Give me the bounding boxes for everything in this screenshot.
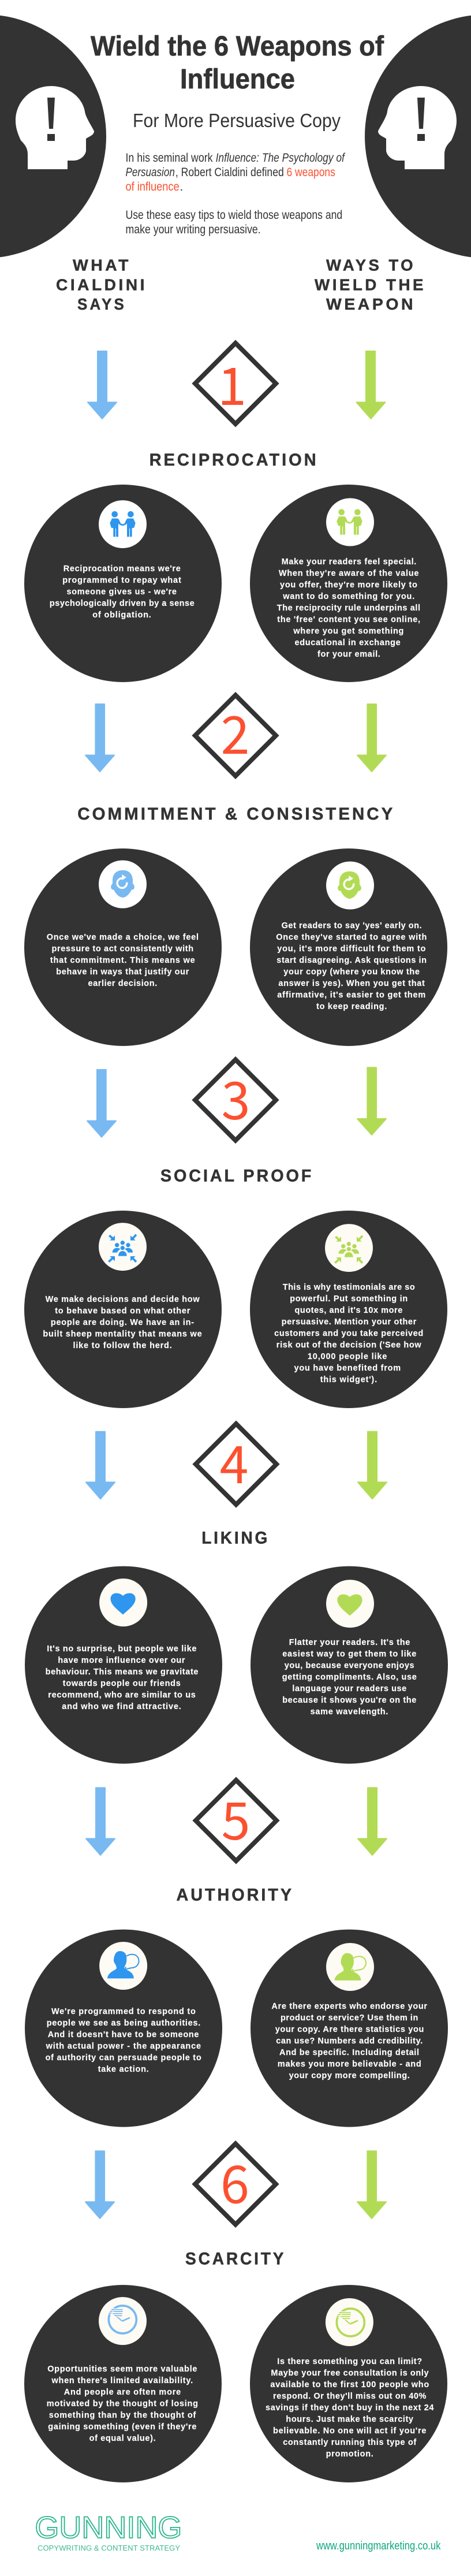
text: of equal value). — [89, 2434, 156, 2443]
title: Wield the 6 Weapons of — [91, 31, 384, 62]
intro paragraph: In his seminal work — [126, 151, 213, 165]
text — [43, 1295, 202, 1350]
intro paragraph — [126, 151, 346, 236]
text: available to the first 100 people who — [270, 2380, 429, 2389]
panel: ways to wield — [251, 1930, 448, 2127]
text: We make decisions and decide how — [46, 1295, 200, 1304]
text — [47, 2365, 198, 2443]
subtitle: For More Persuasive Copy — [133, 110, 341, 131]
column heading: what Cialdini says: SAYS — [77, 295, 126, 313]
text: Opportunities seem more valuable — [47, 2365, 197, 2374]
diamond with number 1 — [195, 343, 276, 424]
panel: ways to wield — [250, 2285, 447, 2482]
text: because it shows you're on the — [282, 1696, 416, 1705]
text — [274, 1283, 423, 1384]
panel: what Cialdini says — [25, 1930, 222, 2127]
website url: www.gunningmarketing.co.uk — [316, 2540, 441, 2552]
text: We're programmed to respond to — [51, 2007, 196, 2016]
icon: head with refresh arrow green — [326, 862, 374, 909]
panel: what Cialdini says — [24, 848, 222, 1046]
icon: person with speech bubble green — [326, 1943, 374, 1991]
diamond with number 4 — [196, 1423, 276, 1505]
icon: handshake blue — [99, 500, 147, 548]
arrow: left blue — [86, 1788, 115, 1855]
arrow: left blue — [88, 351, 117, 419]
column heading: ways to wield the weapon: WIELD THE — [315, 276, 426, 293]
text: Are there experts who endorse your — [271, 2002, 427, 2011]
intro paragraph: make your writing persuasive. — [126, 223, 261, 236]
panel: ways to wield — [250, 485, 447, 682]
text — [282, 1638, 417, 1717]
text — [271, 2002, 427, 2080]
panel: what Cialdini says — [24, 1211, 222, 1408]
panel: what Cialdini says — [25, 1566, 222, 1764]
text: people are doing. We have an in- — [51, 1318, 194, 1327]
text: people we see as being authorities. — [47, 2019, 200, 2028]
icon: crowd with arrows green — [325, 1224, 373, 1272]
text: makes you more believable - and — [278, 2060, 421, 2069]
text: Maybe your free consultation is only — [271, 2369, 429, 2378]
text: 10,000 people like — [308, 1352, 387, 1361]
arrow: right green — [358, 1432, 387, 1499]
panel: section 4 liking — [25, 1423, 448, 1764]
text: savings if they don't buy in the next 24 — [266, 2403, 433, 2413]
intro paragraph: of influence — [126, 180, 180, 193]
column heading: what Cialdini says: WHAT — [73, 256, 131, 274]
intro paragraph: . — [180, 180, 183, 193]
text: Make your readers feel special. — [282, 557, 416, 567]
column heading: ways to wield the weapon: WAYS TO — [326, 256, 416, 274]
text: behave in ways that justify our — [56, 967, 189, 977]
diamond with number 2 — [195, 694, 276, 776]
text: programmed to repay what — [62, 576, 181, 585]
diamond with number 2: 2 — [221, 694, 249, 769]
text: towards people our friends — [63, 1679, 181, 1688]
text: that commitment. This means we — [50, 956, 195, 965]
arrow: left blue — [85, 2151, 114, 2218]
panel: ways to wield — [251, 1566, 448, 1764]
text — [46, 1644, 198, 1711]
text: easiest way to get them to like — [282, 1650, 416, 1659]
text: educational in exchange — [294, 638, 401, 647]
text: with actual power - the appearance — [46, 2042, 201, 2051]
text: your copy. Are there statistics you — [275, 2025, 424, 2034]
text: It's no surprise, but people we like — [47, 1644, 196, 1654]
text: same wavelength. — [311, 1707, 388, 1717]
icon: clock green — [326, 2298, 373, 2346]
text: product or service? Use them in — [281, 2013, 418, 2023]
text: promotion. — [326, 2450, 373, 2459]
text: start disagreeing. Ask questions in — [276, 956, 427, 965]
heading: RECIPROCATION — [149, 451, 319, 470]
arrow: right green — [357, 704, 386, 772]
text: earlier decision. — [88, 979, 157, 988]
title — [91, 31, 384, 95]
text: you have benefited from — [294, 1364, 401, 1373]
text: you, because everyone enjoys — [285, 1661, 414, 1670]
text: Is there something you can limit? — [277, 2357, 422, 2366]
arrow: right green — [357, 2151, 386, 2218]
text: take action. — [98, 2065, 149, 2074]
panel: section 3 social proof — [24, 1059, 447, 1408]
diamond with number 1: 1 — [218, 345, 246, 420]
text: have more influence over our — [58, 1656, 185, 1665]
heading: SCARCITY — [185, 2250, 286, 2269]
text: want to do something for you. — [282, 592, 414, 601]
text: Once we've made a choice, we feel — [47, 933, 199, 942]
diamond with number 6 — [195, 2143, 276, 2225]
diamond with number 3: 3 — [222, 1059, 250, 1134]
text: respond. Or they'll miss out on 40% — [273, 2392, 426, 2401]
icon: crowd with arrows blue — [99, 1223, 147, 1271]
text: when there's limited availability. — [51, 2376, 193, 2385]
text: And be specific. Including detail — [279, 2048, 419, 2057]
column heading: ways to wield the weapon: WEAPON — [326, 295, 416, 313]
right head circle with icon — [365, 14, 471, 258]
panel: section 1 reciprocation — [24, 343, 447, 682]
panel: what Cialdini says — [24, 2285, 222, 2482]
text: Get readers to say 'yes' early on. — [282, 921, 422, 930]
arrow: right green — [357, 1067, 386, 1135]
icon: head with refresh arrow blue — [99, 861, 147, 908]
text — [266, 2357, 433, 2459]
panel: ways to wield — [250, 848, 447, 1046]
diamond with number 5: 5 — [222, 1780, 250, 1855]
text — [47, 933, 199, 988]
text: to keep reading. — [316, 1002, 387, 1011]
title: Influence — [180, 64, 295, 95]
text — [277, 557, 420, 659]
panel: section 5 authority — [25, 1780, 448, 2127]
text: and who we find attractive. — [62, 1702, 181, 1711]
panel: section 6 scarcity — [24, 2143, 447, 2482]
text: someone gives us - we're — [67, 587, 177, 597]
panel: ways to wield — [250, 1211, 447, 1408]
arrow: right green — [357, 351, 386, 419]
text: of obligation. — [92, 611, 151, 620]
text: When they're aware of the value — [279, 569, 418, 578]
column heading: ways to wield the weapon — [315, 256, 426, 313]
text: for your email. — [317, 650, 380, 659]
icon: handshake green — [326, 498, 374, 546]
text: Reciprocation means we're — [63, 564, 181, 574]
text: motivated by the thought of losing — [47, 2399, 198, 2409]
text — [276, 921, 427, 1011]
heading: LIKING — [201, 1529, 270, 1548]
text: your copy more compelling. — [289, 2071, 410, 2080]
panel: header — [0, 14, 471, 313]
text: Once they've started to agree with — [276, 933, 427, 942]
text: powerful. Put something in — [290, 1294, 408, 1304]
intro paragraph: 6 weapons — [286, 166, 335, 179]
heading: AUTHORITY — [177, 1886, 294, 1905]
arrow: right green — [358, 1788, 387, 1855]
text: Flatter your readers. It's the — [289, 1638, 410, 1647]
text: persuasive. Mention your other — [282, 1317, 417, 1327]
text: your copy (where you know the — [283, 967, 420, 977]
icon: clock blue — [99, 2297, 147, 2345]
text: where you get something — [293, 627, 403, 636]
text: like to follow the herd. — [73, 1341, 172, 1350]
column heading: what Cialdini says: CIALDINI — [56, 276, 147, 293]
text: can use? Numbers add credibility. — [276, 2037, 423, 2046]
text: customers and you take perceived — [274, 1329, 423, 1338]
diamond with number 5 — [196, 1780, 276, 1861]
diamond with number 4: 4 — [220, 1423, 248, 1498]
text: This is why testimonials are so — [283, 1283, 415, 1292]
arrow: left blue — [85, 704, 114, 772]
text: you, it's more difficult for them to — [277, 944, 425, 954]
icon: person with speech bubble blue — [99, 1942, 147, 1990]
intro paragraph: Influence: The Psychology of — [216, 151, 346, 165]
text: The reciprocity rule underpins all — [277, 604, 420, 613]
text: constantly running this type of — [283, 2438, 416, 2447]
text: hours. Just make the scarcity — [286, 2415, 413, 2424]
text: quotes, and it's 10x more — [294, 1306, 402, 1315]
text: psychologically driven by a sense — [50, 599, 195, 608]
heading: SOCIAL PROOF — [160, 1167, 313, 1186]
intro paragraph: Persuasion — [126, 166, 175, 179]
panel: section 2 commitment and consistency — [24, 694, 447, 1046]
logo: Gunning: COPYWRITING & CONTENT STRATEGY — [38, 2544, 180, 2552]
intro paragraph: Use these easy tips to wield those weapons and — [126, 209, 342, 222]
logo: Gunning: GUNNING — [35, 2511, 182, 2545]
text: risk out of the decision ('See how — [276, 1341, 421, 1350]
text: you offer, they're more likely to — [280, 580, 417, 590]
arrow: left blue — [87, 1070, 116, 1137]
text: something than by the thought of — [49, 2411, 196, 2420]
text: answer is yes). When you get that — [278, 979, 425, 988]
text: gaining something (even if they're — [48, 2422, 196, 2432]
text: language your readers use — [292, 1684, 406, 1693]
column heading: what Cialdini says — [56, 256, 147, 313]
heading: COMMITMENT & CONSISTENCY — [77, 805, 395, 824]
text: And it doesn't have to be someone — [48, 2030, 199, 2039]
panel: what Cialdini says — [24, 485, 222, 682]
intro paragraph: , Robert Cialdini defined — [175, 166, 284, 179]
text: built sheep mentality that means we — [43, 1330, 202, 1339]
icon: heart green — [326, 1580, 374, 1628]
text: behaviour. This means we gravitate — [46, 1667, 198, 1677]
left head circle with icon — [0, 14, 106, 258]
text: And people are often more — [64, 2388, 181, 2397]
text: pressure to act consistently with — [52, 944, 193, 954]
diamond with number 6: 6 — [220, 2143, 249, 2218]
icon: heart blue — [99, 1579, 147, 1626]
text: this widget'). — [320, 1375, 377, 1384]
diamond with number 3 — [195, 1059, 276, 1140]
text — [46, 2007, 201, 2074]
text: to behave based on what other — [55, 1306, 190, 1316]
text — [50, 564, 195, 620]
text: the 'free' content you see online, — [277, 615, 420, 624]
text: getting compliments. Also, use — [282, 1673, 417, 1682]
text: of authority can persuade people to — [46, 2053, 201, 2063]
text: recommend, who are similar to us — [48, 1691, 196, 1700]
text: believable. No one will act if you're — [273, 2426, 426, 2436]
text: affirmative, it's easier to get them — [277, 991, 425, 1000]
arrow: left blue — [86, 1432, 115, 1499]
